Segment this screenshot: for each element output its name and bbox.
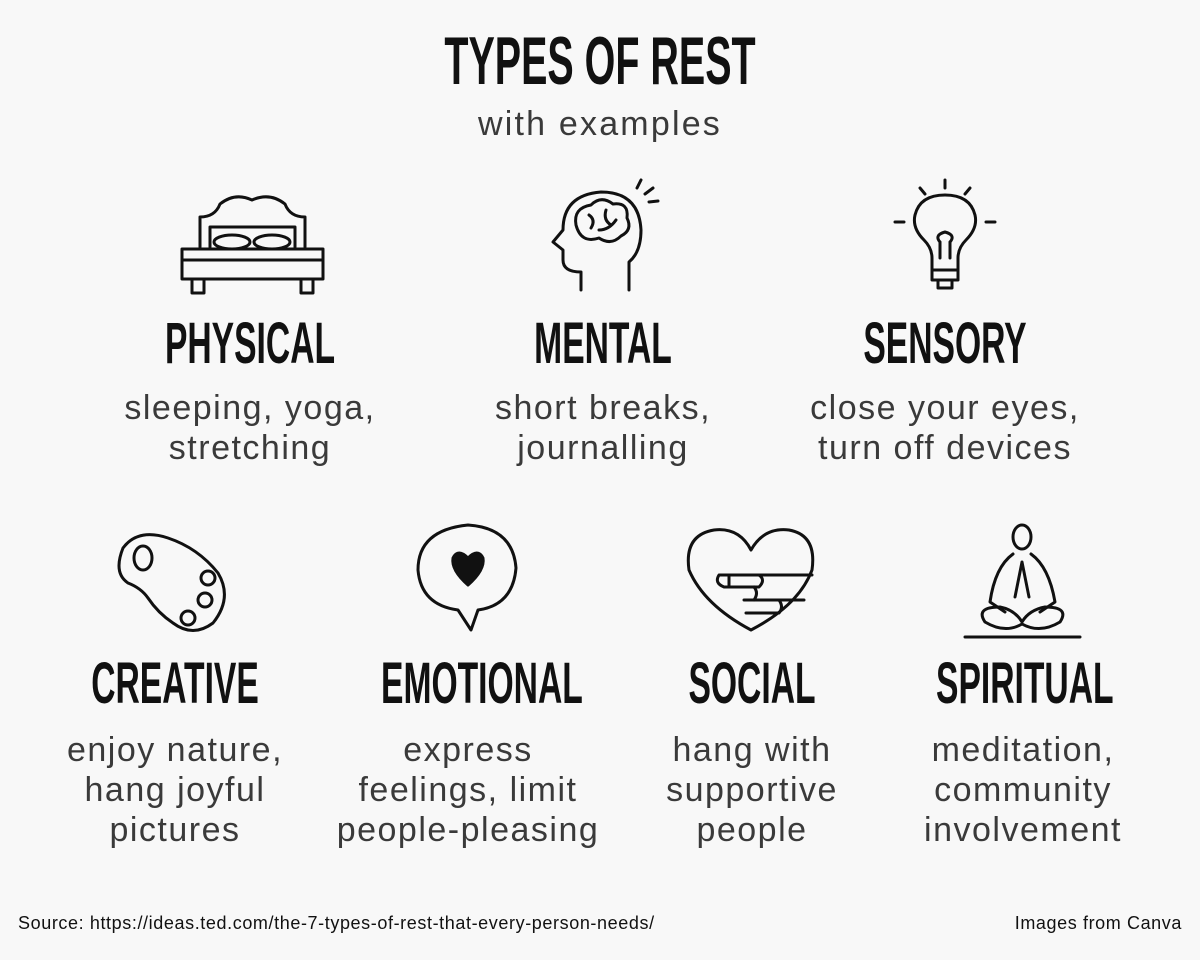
text: hang joyful [85,771,265,809]
heading: SENSORY [863,311,1027,376]
text: community [934,771,1112,809]
text: stretching [169,429,331,467]
panel: physical [124,195,376,467]
text: close your eyes, [810,389,1080,427]
text [810,389,1080,467]
text [124,389,376,467]
text: feelings, limit [358,771,578,809]
icon: bed [180,195,324,294]
heading: EMOTIONAL [381,651,583,716]
text: pictures [109,811,241,849]
text [337,731,599,849]
text: supportive [666,771,838,809]
heading: SPIRITUAL [936,651,1114,716]
text: sleeping, yoga, [124,389,376,427]
text: people [696,811,808,849]
panel: creative [67,533,283,849]
text: involvement [924,811,1122,849]
panel: sensory [810,178,1080,467]
title: TYPES OF REST [444,23,756,99]
text: journalling [517,429,689,467]
text [924,731,1122,849]
text: turn off devices [818,429,1072,467]
text [666,731,838,849]
footer: source: Source: https://ideas.ted.com/the-7-types-of-rest-that-every-person-needs/ [18,913,655,933]
panel: social [666,528,838,849]
icon: palette [118,533,226,632]
text [495,389,711,467]
text: people-pleasing [337,811,599,849]
icon: hugging heart [686,528,814,632]
panel: mental [495,178,711,467]
text [67,731,283,849]
heading: PHYSICAL [165,311,335,376]
text: enjoy nature, [67,731,283,769]
text: short breaks, [495,389,711,427]
footer: credit: Images from Canva [1015,913,1182,933]
heading: MENTAL [534,311,672,376]
panel: spiritual [924,524,1122,849]
text: express [403,731,533,769]
panel: emotional [337,524,599,849]
icon: speech bubble heart [416,524,518,632]
heading: SOCIAL [688,651,816,716]
icon: brain head [551,178,660,292]
icon: meditating person [964,524,1082,638]
text: hang with [672,731,832,769]
heading: CREATIVE [91,651,259,716]
text: meditation, [932,731,1114,769]
subtitle: with examples [478,105,722,143]
icon: light bulb [894,178,996,290]
